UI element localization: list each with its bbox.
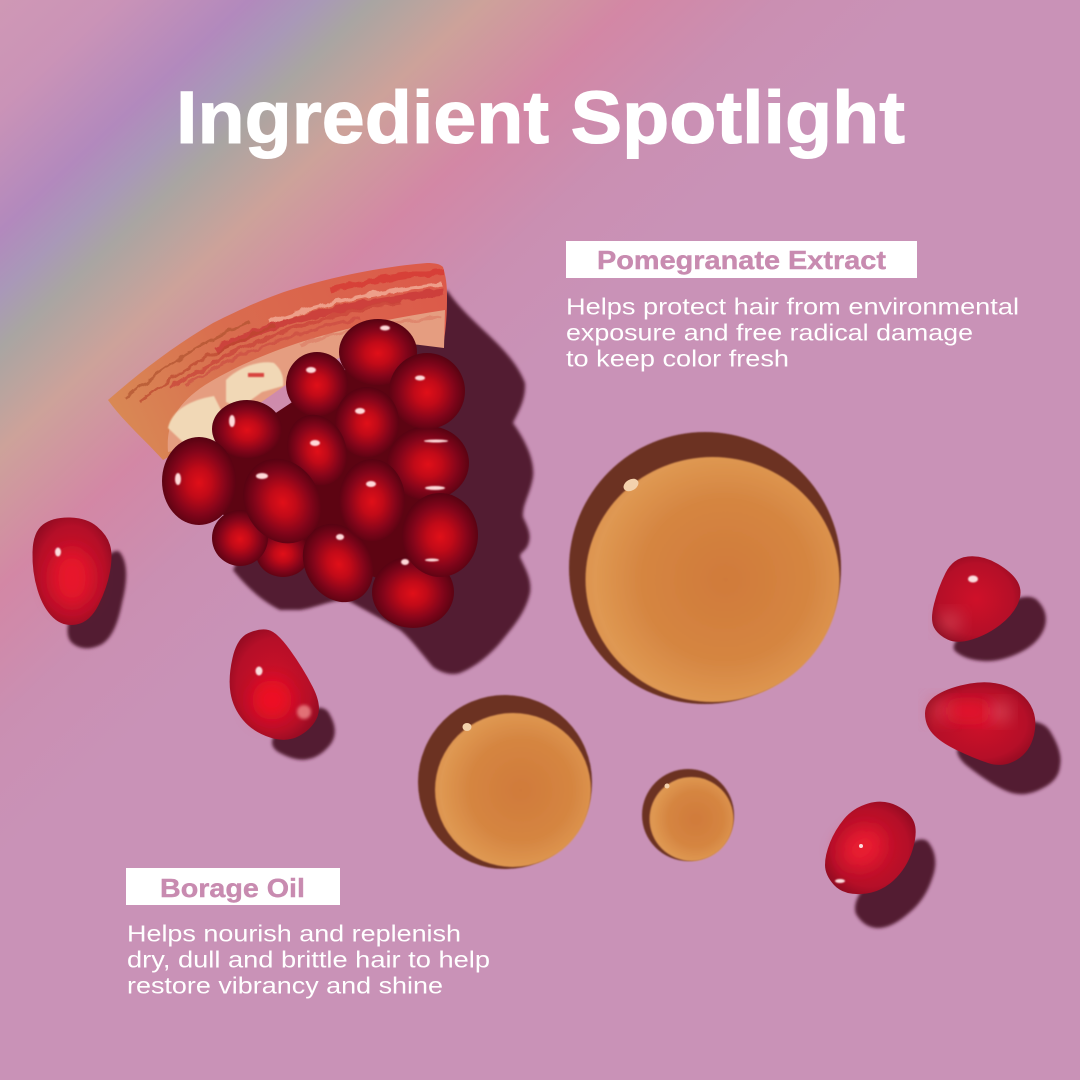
oil drop: small: [642, 769, 734, 861]
red fleck on pith: [248, 373, 264, 377]
pale inner flesh: [168, 310, 445, 452]
cream pith upper: [226, 362, 283, 408]
text block: Pomegranate Extract description: to keep color fresh: [566, 346, 789, 372]
label: Borage Oil: Borage Oil: [160, 873, 305, 903]
label: Pomegranate Extract: [566, 241, 917, 278]
text block: Pomegranate Extract description: [566, 294, 1019, 372]
text block: Borage Oil description: [127, 920, 490, 998]
cream pith: [168, 396, 222, 445]
arils cluster: [162, 319, 478, 628]
label: Pomegranate Extract: Pomegranate Extract: [597, 245, 886, 275]
rind wedge: [108, 263, 447, 460]
text block: Borage Oil description: restore vibrancy and shine: [127, 972, 443, 998]
text block: Borage Oil description: dry, dull and brittle hair to help: [127, 946, 490, 972]
red fibres on rind: [125, 272, 444, 402]
loose aril: lower right: [825, 802, 935, 928]
oil drop: large: [569, 432, 841, 704]
loose aril: lower left: [230, 629, 335, 760]
dark base behind arils: [199, 352, 440, 592]
aril highlights: [175, 326, 448, 565]
label: Borage Oil: [126, 868, 340, 905]
title: Ingredient Spotlight: [176, 76, 905, 159]
text block: Pomegranate Extract description: Helps protect hair from environmental: [566, 294, 1019, 320]
pomegranate wedge with arils: [108, 263, 533, 674]
wedge cast shadow: [233, 290, 533, 674]
text block: Pomegranate Extract description: exposure and free radical damage: [566, 320, 973, 346]
loose aril: right top: [932, 556, 1046, 661]
text block: Borage Oil description: Helps nourish and replenish: [127, 920, 461, 946]
loose aril: right middle: [925, 682, 1061, 794]
loose aril: far left: [32, 517, 126, 648]
oil drop: medium: [418, 695, 592, 869]
